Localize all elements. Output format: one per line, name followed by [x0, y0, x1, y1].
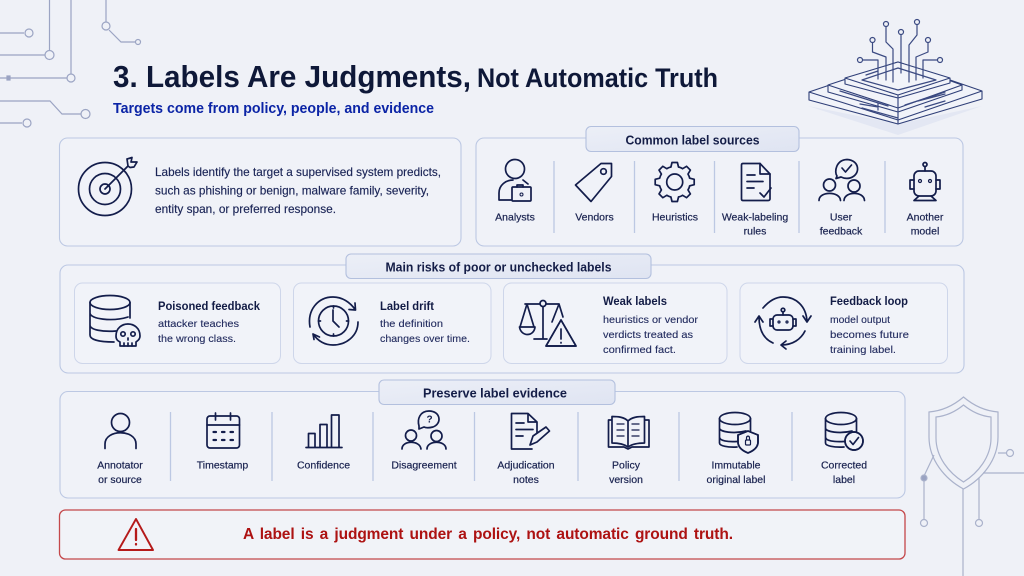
icon: clock with arrows	[310, 297, 358, 345]
evidence: adjudication notes: Adjudication	[497, 460, 555, 472]
evidence: annotator or source: Annotator	[97, 460, 143, 472]
evidence: disagreement: Disagreement	[391, 460, 457, 472]
card: feedback loop: Feedback loop	[830, 296, 908, 308]
decoration: shield with circuit	[920, 397, 1024, 576]
illustration: isometric circuit maze	[808, 20, 982, 135]
evidence: confidence	[297, 415, 350, 472]
source: another model: Another	[907, 212, 944, 224]
callout: warning banner	[60, 510, 905, 559]
evidence: corrected label: Corrected	[821, 460, 867, 472]
panel: common label sources	[476, 126, 963, 246]
icon: scales with warning	[520, 300, 576, 346]
card: poisoned feedback	[74, 283, 280, 364]
source: analysts	[495, 160, 535, 224]
subtitle: Targets come from policy, people, and evidence	[113, 100, 434, 117]
evidence: timestamp: Timestamp	[197, 460, 248, 472]
card: feedback loop: training label.	[830, 344, 896, 356]
title: Not Automatic Truth	[477, 63, 718, 93]
evidence: policy version	[608, 416, 649, 486]
heading: common label sources	[586, 126, 799, 152]
source: analysts: Analysts	[495, 212, 535, 224]
source: heuristics: Heuristics	[652, 212, 698, 224]
evidence: annotator or source	[97, 414, 143, 486]
icon: warning triangle	[118, 519, 153, 550]
evidence: adjudication notes: notes	[513, 474, 539, 486]
source: weak-labeling rules: Weak-labeling	[722, 212, 788, 224]
panel: definition of labels	[60, 138, 461, 246]
card: feedback loop: model output	[830, 314, 890, 326]
heading: preserve label evidence: Preserve label evidence	[423, 386, 567, 400]
evidence: disagreement: ?	[426, 414, 433, 426]
heading: main risks	[346, 254, 651, 278]
definition text: such as phishing or benign, malware family, severity,	[155, 184, 429, 198]
source: weak-labeling rules	[722, 164, 788, 238]
evidence: adjudication notes	[497, 414, 555, 486]
evidence: policy version: version	[609, 474, 643, 486]
source: weak-labeling rules: rules	[744, 226, 766, 238]
evidence: annotator or source: or source	[98, 474, 142, 486]
card: weak labels: heuristics or vendor	[603, 314, 699, 326]
card: weak labels: confirmed fact.	[603, 344, 676, 356]
definition text: Labels identify the target a supervised system predicts,	[155, 165, 441, 179]
icon: robot in loop	[755, 297, 811, 349]
evidence: confidence: Confidence	[297, 460, 350, 472]
heading: preserve label evidence	[379, 380, 615, 404]
evidence: immutable original label	[707, 412, 765, 486]
icon: target with arrow	[78, 158, 137, 216]
card: poisoned feedback: attacker teaches	[158, 318, 239, 330]
definition text: entity span, or preferred response.	[155, 202, 336, 216]
callout text: A label is a judgment under a policy, not automatic ground truth.	[243, 526, 733, 543]
evidence: immutable original label: Immutable	[711, 460, 761, 472]
evidence: policy version: Policy	[612, 460, 641, 472]
card: weak labels: Weak labels	[603, 296, 667, 308]
card: feedback loop: becomes future	[830, 329, 909, 341]
evidence: disagreement	[391, 411, 457, 472]
card: weak labels	[504, 283, 727, 364]
card: label drift: changes over time.	[380, 333, 470, 345]
evidence: immutable original label: original label	[707, 474, 765, 486]
panel: preserve label evidence	[60, 380, 905, 498]
source: vendors: Vendors	[575, 212, 614, 224]
source: user feedback: feedback	[820, 226, 863, 238]
evidence: timestamp	[197, 413, 248, 472]
card: poisoned feedback: the wrong class.	[158, 333, 236, 345]
decoration: top-left circuit traces	[0, 0, 140, 127]
card: label drift: the definition	[380, 318, 443, 330]
source: another model: model	[911, 226, 939, 238]
source: vendors	[575, 164, 614, 224]
card: poisoned feedback: Poisoned feedback	[158, 301, 261, 313]
source: another model	[907, 162, 944, 238]
evidence: corrected label	[821, 412, 867, 486]
card: feedback loop	[740, 283, 948, 364]
source: user feedback: User	[830, 212, 853, 224]
title: 3. Labels Are Judgments,	[113, 59, 471, 94]
evidence: corrected label: label	[833, 474, 855, 486]
card: label drift: Label drift	[380, 301, 434, 313]
card: weak labels: verdicts treated as	[603, 329, 693, 341]
icon: database with skull	[90, 296, 140, 346]
heading: common label sources: Common label sources	[626, 132, 760, 148]
card: label drift	[294, 283, 491, 364]
source: user feedback	[819, 160, 864, 238]
heading: main risks: Main risks of poor or unchecked labels	[386, 260, 612, 274]
source: heuristics	[652, 162, 698, 224]
panel: main risks	[60, 254, 964, 373]
